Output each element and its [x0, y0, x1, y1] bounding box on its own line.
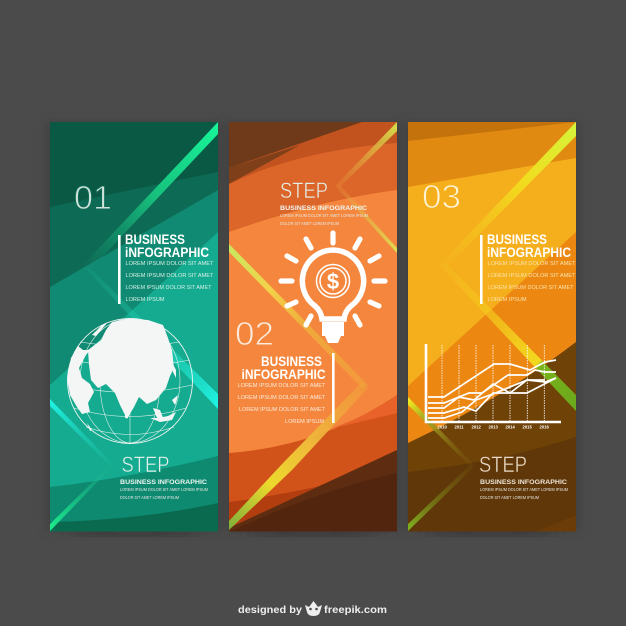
icon: globe	[67, 318, 192, 444]
divider bar	[118, 235, 121, 304]
panel: step 02 orange	[229, 122, 397, 532]
lorem text list: LOREM IPSUM DOLOR SIT AMET	[126, 273, 214, 279]
line chart	[426, 344, 561, 430]
lorem text list: LOREM IPSUM DOLOR SIT AMET	[126, 285, 212, 291]
subtitle: BUSINESS INFOGRAPHIC	[120, 479, 207, 486]
lorem text list: LOREM IPSUM DOLOR SIT AMET	[488, 261, 576, 267]
heading: business infographic: BUSINESS	[487, 232, 547, 247]
heading: business infographic: BUSINESS	[125, 232, 185, 247]
heading: business infographic: iNFOGRAPHIC	[242, 367, 326, 382]
lorem lines	[120, 488, 208, 499]
lorem text list: LOREM IPSUM DOLOR SIT AMET	[488, 273, 576, 279]
footer credit	[238, 601, 387, 616]
heading: business infographic	[126, 234, 209, 257]
divider bar	[332, 353, 335, 423]
subtitle: BUSINESS INFOGRAPHIC	[480, 479, 567, 486]
lorem lines: DOLOR SIT AMET LOREM IPSUM	[480, 495, 539, 500]
divider bar	[480, 235, 483, 304]
icon: light bulb with dollar	[281, 233, 385, 343]
lorem lines	[480, 488, 568, 499]
line chart: 2015	[522, 424, 532, 430]
heading: business infographic: iNFOGRAPHIC	[125, 245, 209, 260]
line chart: 2011	[454, 424, 464, 430]
panel: step 01 green	[50, 122, 218, 532]
line chart: 2010	[438, 424, 447, 430]
icon: freepik logo	[305, 601, 322, 616]
heading: step: STEP	[280, 178, 328, 203]
subtitle: BUSINESS INFOGRAPHIC	[280, 205, 367, 212]
lorem text list	[488, 261, 576, 303]
lorem lines: DOLOR SIT AMET LOREM IPSUM	[280, 221, 339, 226]
number 02: 02	[235, 315, 274, 352]
lorem text list: LOREM IPSUM DOLOR SIT AMET	[488, 285, 574, 291]
number 01: 01	[74, 179, 112, 216]
line chart: 2012	[472, 424, 481, 430]
lorem lines: LOREM IPSUM DOLOR SIT AMET LOREM IPSUM	[120, 487, 208, 492]
footer credit: freepik.com	[324, 604, 387, 616]
heading: step: STEP	[122, 452, 170, 477]
heading: business infographic: iNFOGRAPHIC	[487, 245, 571, 260]
line chart: 2013	[488, 424, 498, 430]
lorem text list	[238, 383, 326, 425]
lorem text list: LOREM IPSUM	[488, 297, 527, 303]
line chart: 2016	[540, 424, 549, 430]
lorem lines: LOREM IPSUM DOLOR SIT AMET LOREM IPSUM	[280, 213, 368, 218]
lorem text list: LOREM IPSUM DOLOR SIT AMET	[238, 383, 326, 389]
lorem text list	[126, 261, 214, 303]
lorem text list: LOREM IPSUM	[285, 419, 324, 425]
lorem text list: LOREM IPSUM DOLOR SIT AMET	[239, 407, 325, 413]
lorem lines	[280, 214, 368, 225]
panel: step 03 amber	[408, 122, 576, 532]
lorem text list: LOREM IPSUM DOLOR SIT AMET	[238, 395, 326, 401]
number 03: 03	[422, 178, 461, 215]
lorem text list: LOREM IPSUM DOLOR SIT AMET	[126, 261, 214, 267]
icon: light bulb with dollar: $	[327, 269, 339, 294]
heading: business infographic	[242, 356, 326, 379]
line chart: 2014	[506, 424, 515, 430]
heading: business infographic	[488, 234, 571, 257]
lorem lines: DOLOR SIT AMET LOREM IPSUM	[120, 495, 179, 500]
footer credit: designed by	[238, 604, 302, 616]
heading: business infographic: BUSINESS	[261, 354, 322, 369]
lorem lines: LOREM IPSUM DOLOR SIT AMET LOREM IPSUM	[480, 487, 568, 492]
lorem text list: LOREM IPSUM	[126, 297, 165, 303]
heading: step: STEP	[479, 452, 527, 477]
